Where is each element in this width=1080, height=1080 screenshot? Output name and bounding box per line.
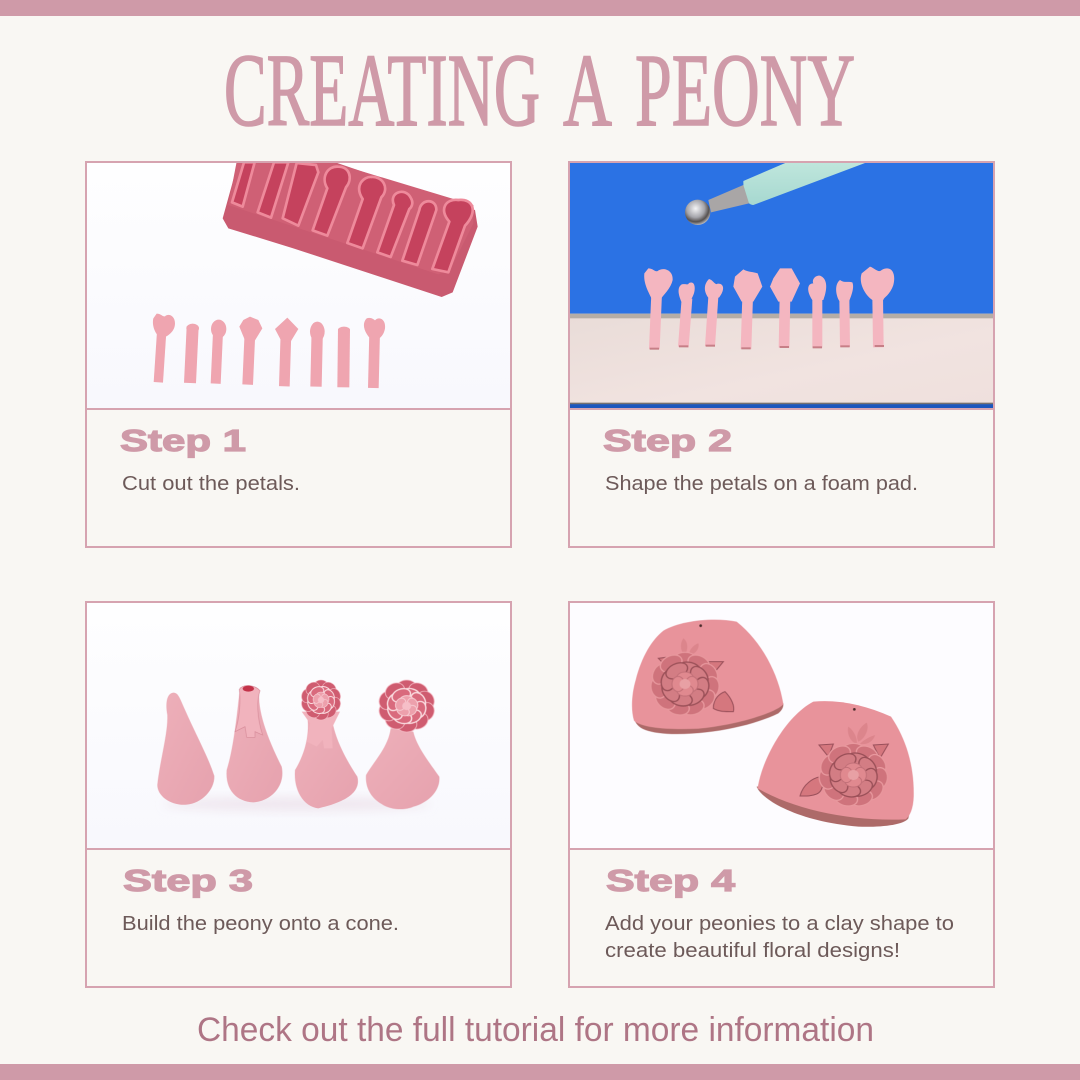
photo: clay shapes with peonies (570, 603, 993, 848)
step 2 frame (569, 162, 994, 547)
petals (654, 293, 878, 349)
cone 1 (157, 693, 214, 805)
step 4 heading: Step 4 (606, 863, 736, 898)
clay shape 1 (632, 620, 783, 734)
leaves (681, 638, 698, 654)
panel: step 4 (569, 602, 994, 987)
cone 2 (227, 686, 282, 802)
photo: petal cutter and cut petals (87, 162, 510, 408)
cone 4 (366, 679, 439, 809)
panel: step 2 (569, 162, 994, 547)
step 3 frame (86, 602, 511, 987)
footer call to action: Check out the full tutorial for more information (197, 1011, 874, 1049)
step 3 text: Build the peony onto a cone. (122, 913, 399, 935)
bottom bar (0, 1064, 1080, 1080)
clay shape 2 (757, 701, 914, 827)
petals (158, 325, 375, 388)
step 2 text: Shape the petals on a foam pad. (605, 473, 918, 495)
icon: cutter (223, 162, 478, 297)
step 4 text (605, 913, 954, 962)
top bar (0, 0, 1080, 16)
step 1 text: Cut out the petals. (122, 473, 300, 495)
title: PEONY (635, 33, 855, 148)
step 4 text: create beautiful floral designs! (605, 940, 900, 962)
panel: step 1 (86, 162, 511, 547)
step 1 heading: Step 1 (120, 423, 246, 458)
step 4 frame (569, 602, 994, 987)
photo: shaped petals on blue foam (570, 162, 993, 409)
step 3 heading: Step 3 (123, 863, 253, 898)
leaves (848, 723, 875, 744)
panel: step 3 (86, 602, 511, 987)
steel ruler (570, 314, 993, 404)
photo: clay cones with growing flower (87, 603, 510, 848)
title: CREATING (224, 33, 540, 148)
icon: ball tool (685, 162, 867, 225)
title: A (563, 33, 612, 148)
step 1 frame (86, 162, 511, 547)
step 4 text: Add your peonies to a clay shape to (605, 913, 954, 935)
cone 3 (295, 680, 358, 808)
cone shadows (163, 797, 430, 811)
step 2 heading: Step 2 (603, 423, 732, 458)
